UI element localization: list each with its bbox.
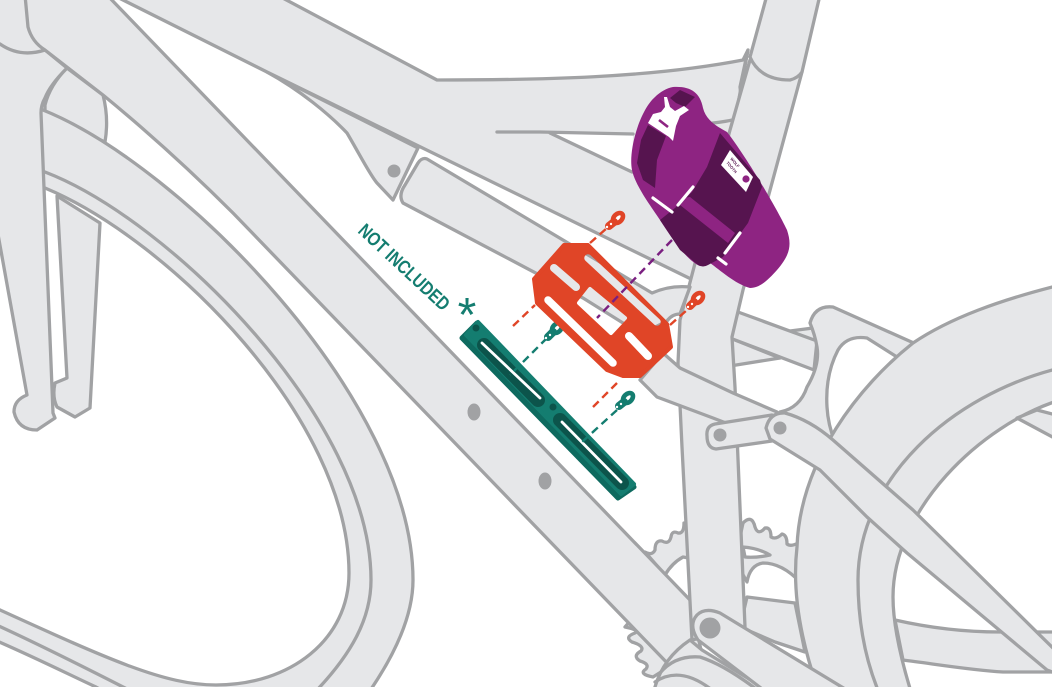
bag brand label bbox=[721, 150, 753, 192]
short link with pivot bbox=[707, 415, 772, 449]
fork blade, far side lower bbox=[54, 196, 100, 417]
bag centre stripe bbox=[680, 197, 735, 243]
head tube bbox=[0, 0, 45, 53]
fork blade, far side upper bbox=[45, 68, 107, 142]
teal bolt 2 bbox=[616, 391, 635, 408]
orange adapter plate bbox=[534, 245, 671, 376]
not included label: NOT INCLUDED bbox=[354, 220, 453, 315]
orange bolt 2 bbox=[687, 291, 705, 308]
orange dashed guides bbox=[513, 228, 687, 407]
seat tube bbox=[678, 60, 802, 640]
rear wheel tyre bbox=[796, 285, 1052, 687]
asterisk: * bbox=[458, 289, 476, 342]
orange bolt 1 bbox=[606, 211, 625, 228]
teal mounting rail bbox=[462, 322, 634, 498]
chain stay, near side bbox=[740, 597, 805, 652]
top tube bbox=[113, 0, 748, 280]
front wheel tyre bbox=[0, 100, 413, 687]
fork blade, near side bbox=[0, 40, 67, 430]
rear shock bbox=[401, 158, 690, 335]
bag brand label: WOLF bbox=[729, 156, 741, 169]
frame bolt holes bbox=[468, 404, 552, 490]
seatpost bbox=[750, 0, 820, 80]
chainring bbox=[625, 519, 800, 677]
down tube bbox=[25, 0, 712, 687]
bag brand label: TOOTH bbox=[725, 160, 738, 174]
rocker link bbox=[780, 307, 916, 442]
teal dashed guides bbox=[510, 338, 617, 442]
rear stays bbox=[895, 410, 1052, 672]
suspension link bbox=[640, 353, 777, 440]
bag top patch bbox=[670, 90, 695, 107]
chain stays behind rocker bbox=[730, 312, 817, 370]
seat tube bracket and pivot bbox=[267, 72, 418, 200]
bottom bracket shell bbox=[653, 640, 775, 687]
teal bolt 1 bbox=[545, 321, 564, 339]
crank arm with pivot bbox=[693, 610, 855, 687]
bag white strap marks bbox=[653, 187, 740, 264]
seat stay with pivot bbox=[766, 413, 1052, 675]
purple dashed guide bbox=[597, 240, 672, 318]
purple frame bag bbox=[631, 87, 790, 288]
bag main strap band bbox=[660, 133, 762, 266]
bag side pocket bbox=[637, 125, 666, 188]
bag buckle bbox=[648, 97, 689, 141]
